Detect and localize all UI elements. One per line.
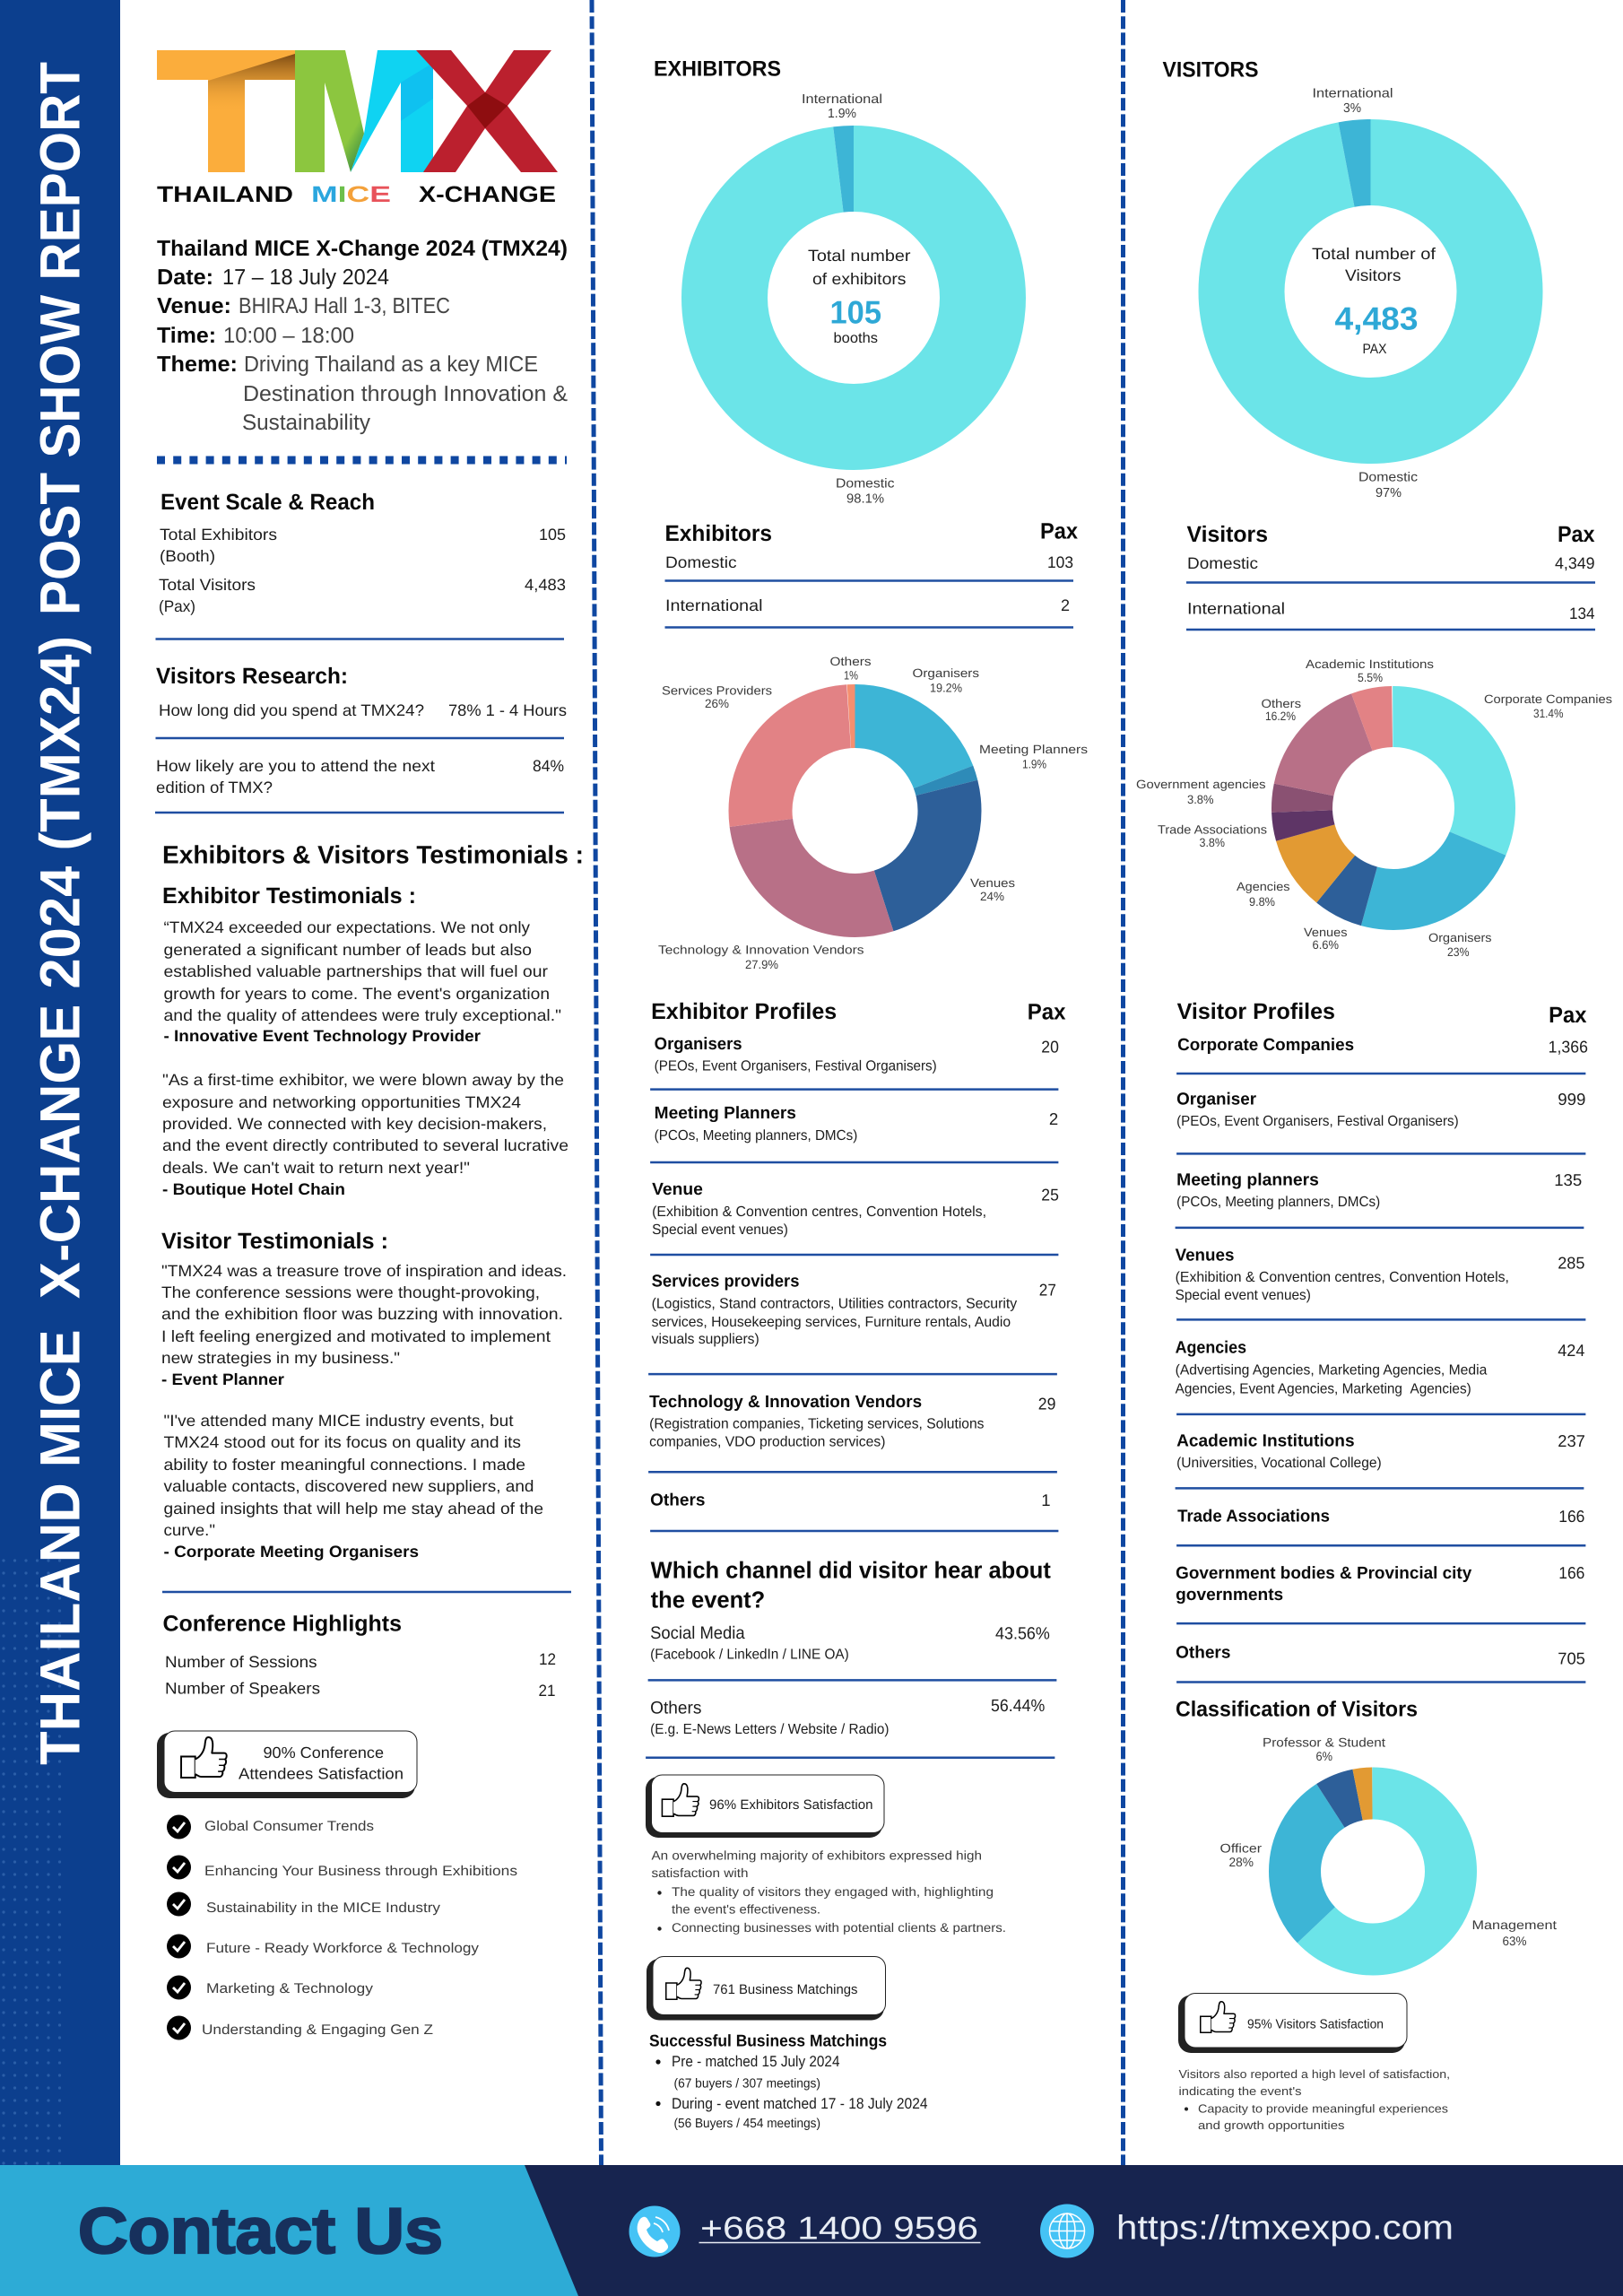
event details: Destination through Innovation & (243, 382, 568, 406)
badge: 761 business matchings: 761 Business Matchings (713, 1982, 857, 1997)
text: exhibitor satisfaction notes: An overwhelming majority of exhibitors expressed high (651, 1848, 982, 1862)
section: visitors research: How likely are you to attend the next (156, 757, 435, 775)
table: visitors domestic / international: Pax (1558, 522, 1595, 547)
donut chart: exhibitors origin: Domestic (836, 477, 895, 491)
donut chart: classification of visitors (1219, 1735, 1557, 1950)
section: conference highlights: 21 (538, 1682, 556, 1700)
donut chart: visitors origin: 3% (1343, 101, 1361, 116)
table: exhibitor profiles (648, 999, 1066, 1374)
table: exhibitor profiles continued: companies, VDO production services) (649, 1434, 885, 1450)
heading: visitors: VISITORS (1162, 57, 1259, 83)
table: exhibitor profiles continued: Technology & Innovation Vendors (649, 1393, 922, 1412)
visitor testimonial 2: gained insights that will help me stay ahead of the (163, 1500, 543, 1518)
badge: 90% conference attendees satisfaction: Attendees Satisfaction (239, 1765, 404, 1783)
donut chart: exhibitors origin: International (802, 92, 882, 107)
section: conference highlights (163, 1611, 556, 1700)
text: exhibitor satisfaction notes: Connecting businesses with potential clients & partners. (672, 1920, 1006, 1935)
column dividers (592, 0, 1123, 2165)
table: visitor profiles continued: Trade Associations (1177, 1507, 1330, 1526)
section: visitors research (156, 664, 567, 796)
text: visitor satisfaction notes: Capacity to provide meaningful experiences (1198, 2102, 1449, 2115)
donut chart: visitor profiles: 31.4% (1533, 707, 1564, 720)
section: visitor channel: Which channel did visitor hear about (651, 1556, 1051, 1583)
donut chart: exhibitor profiles: 1% (844, 669, 858, 682)
table: exhibitor profiles continued: Others (650, 1491, 705, 1509)
section: event scale and reach: 105 (539, 526, 566, 544)
section: event scale and reach (159, 490, 566, 615)
conference topics checklist: Global Consumer Trends (204, 1819, 374, 1834)
exhibitor testimonial 2: and the event directly contributed to several lucrative (162, 1136, 568, 1154)
exhibitor testimonial 2: - Boutique Hotel Chain (162, 1180, 345, 1198)
event details: 10:00 – 18:00 (223, 324, 354, 348)
donut chart: visitor profiles: Venues (1304, 926, 1348, 939)
section: visitor channel: (E.g. E-News Letters / Website / Radio) (650, 1722, 889, 1737)
exhibitor testimonial 1: “TMX24 exceeded our expectations. We not only (163, 918, 530, 936)
icon: thumbs up (1201, 2002, 1236, 2032)
event details: Venue: (157, 294, 231, 318)
table: visitor profiles: (PEOs, Event Organisers, Festival Organisers) (1176, 1114, 1459, 1129)
event details: Thailand MICE X-Change 2024 (TMX24) (157, 237, 568, 261)
donut chart: visitors origin: Domestic (1358, 470, 1418, 484)
table: visitors domestic / international: International (1187, 599, 1285, 617)
event details: Sustainability (242, 411, 371, 435)
logo: TMX: X-CHANGE (419, 182, 556, 207)
table: exhibitor profiles continued: 29 (1038, 1394, 1055, 1413)
exhibitor testimonial 2: "As a first-time exhibitor, we were blown away by the (162, 1071, 564, 1089)
table: visitor profiles continued: 237 (1558, 1431, 1585, 1450)
conference topics checklist: Understanding & Engaging Gen Z (202, 2022, 433, 2038)
table: visitor profiles: Special event venues) (1176, 1288, 1311, 1303)
donut chart: visitor profiles: 9.8% (1249, 895, 1275, 909)
table: visitor profiles: 999 (1558, 1090, 1585, 1109)
visitor testimonial 2: "I've attended many MICE industry events, but (163, 1412, 513, 1430)
donut chart: visitor profiles: 23% (1447, 945, 1469, 959)
donut chart: exhibitor profiles: Services Providers (662, 683, 772, 698)
section: event scale and reach: 4,483 (525, 576, 566, 594)
table: visitor profiles: Agencies (1176, 1338, 1246, 1358)
section: visitors research: How long did you spend at TMX24? (159, 701, 424, 719)
section: conference highlights: 12 (539, 1650, 556, 1668)
badge: 95% visitors satisfaction (1178, 1993, 1407, 2053)
exhibitor testimonial 1: - Innovative Event Technology Provider (163, 1027, 481, 1045)
table: visitor profiles: Pax (1549, 1003, 1586, 1028)
phone number: +668 1400 9596 (700, 2210, 978, 2246)
donut chart: visitors origin: PAX (1363, 342, 1387, 357)
donut chart: exhibitor profiles: Others (830, 655, 872, 668)
section: conference highlights: Number of Sessions (165, 1653, 317, 1671)
contact us heading: Contact Us (78, 2196, 443, 2267)
text: successful business matchings (649, 2031, 927, 2131)
table: visitor profiles: 135 (1554, 1170, 1582, 1189)
donut chart: exhibitors origin: of exhibitors (812, 270, 906, 288)
table: visitor profiles continued: Academic Institutions (1176, 1432, 1355, 1451)
icon: thumbs up (181, 1737, 227, 1778)
testimonials heading: Exhibitors & Visitors Testimonials : (162, 841, 584, 868)
table: exhibitors domestic / international: Pax (1040, 518, 1078, 544)
donut chart: classification of visitors: 28% (1228, 1855, 1254, 1869)
visitor testimonial 2: ability to foster meaningful connections. I made (163, 1456, 525, 1474)
table: visitors domestic / international: Visitors (1187, 522, 1268, 547)
table: visitors domestic / international: 134 (1569, 604, 1594, 622)
table: visitor profiles: Venues (1176, 1246, 1234, 1265)
conference topics checklist (167, 1815, 517, 2039)
table: exhibitor profiles: services, Housekeeping services, Furniture rentals, Audio (652, 1315, 1011, 1330)
donut chart: visitor profiles: 3.8% (1187, 793, 1214, 806)
visitor testimonials heading: Visitor Testimonials : (161, 1229, 388, 1254)
exhibitor testimonial 1: generated a significant number of leads but also (163, 941, 532, 959)
visitor testimonial 1: and the exhibition floor was buzzing with innovation. (161, 1305, 563, 1323)
badge: 90% conference attendees satisfaction (157, 1731, 417, 1798)
donut chart: visitor profiles: Others (1261, 697, 1301, 710)
table: exhibitors domestic / international (665, 518, 1078, 628)
icon: thumbs up (662, 1784, 699, 1816)
donut chart: visitor profiles: Organisers (1428, 931, 1492, 944)
visitor testimonial 1: new strategies in my business." (161, 1349, 400, 1367)
text: successful business matchings: (67 buyers / 307 meetings) (674, 2077, 820, 2092)
section: visitor channel: Others (650, 1698, 702, 1718)
section: event scale and reach: (Booth) (160, 547, 215, 565)
donut chart: exhibitor profiles: 24% (980, 890, 1004, 903)
donut chart: exhibitor profiles: Venues (970, 876, 1015, 890)
donut chart: visitors origin: Total number of (1312, 245, 1436, 263)
table: visitor profiles: 285 (1558, 1253, 1584, 1273)
panel: left column (155, 50, 584, 2039)
donut chart: visitor profiles: 5.5% (1358, 671, 1383, 684)
conference topics checklist: Future - Ready Workforce & Technology (206, 1941, 479, 1956)
donut chart: exhibitor profiles: 26% (705, 697, 729, 710)
table: visitor profiles continued: 166 (1558, 1563, 1584, 1582)
vertical report title (29, 62, 91, 1765)
icon: thumbs up (666, 1968, 701, 1999)
table: visitor profiles: Agencies, Event Agencies, Marketing Agencies) (1176, 1381, 1471, 1396)
table: exhibitors domestic / international: International (665, 596, 762, 614)
section: visitors research: 78% 1 - 4 Hours (448, 701, 567, 719)
event details: Theme: (157, 352, 238, 377)
donut chart: classification of visitors: Management (1472, 1918, 1557, 1932)
logo: TMX (157, 50, 558, 207)
table: visitor profiles: Visitor Profiles (1177, 999, 1335, 1024)
exhibitor testimonial 2: provided. We connected with key decision-makers, (162, 1115, 547, 1133)
event details: Time: (157, 324, 216, 348)
text: exhibitor satisfaction notes: satisfaction with (651, 1866, 748, 1880)
table: visitor profiles continued: 166 (1558, 1507, 1584, 1526)
table: exhibitor profiles: Special event venues) (652, 1222, 788, 1238)
text: visitor satisfaction notes (1178, 2067, 1450, 2132)
donut chart: classification of visitors: Officer (1219, 1840, 1262, 1855)
text: exhibitor satisfaction notes: the event's effectiveness. (672, 1901, 820, 1916)
donut chart: exhibitor profiles: Technology & Innovation Vendors (658, 944, 864, 956)
donut chart: visitors origin: International (1313, 86, 1393, 100)
table: visitor profiles (1176, 999, 1588, 1414)
section: visitors research: Visitors Research: (156, 664, 348, 689)
section: conference highlights: Number of Speakers (165, 1679, 320, 1697)
visitor testimonial 1: - Event Planner (161, 1370, 284, 1388)
visitor testimonial 2 (163, 1412, 543, 1561)
vertical report title: POST SHOW REPORT (29, 62, 91, 615)
donut chart: classification of visitors: 63% (1503, 1934, 1526, 1948)
panel: right column (1136, 57, 1612, 2132)
table: exhibitor profiles: visuals suppliers) (652, 1332, 759, 1347)
exhibitor testimonial 2 (162, 1071, 568, 1198)
donut chart: visitor profiles (1136, 657, 1612, 959)
event details (157, 237, 568, 435)
text: successful business matchings: (56 Buyers / 454 meetings) (674, 2117, 820, 2131)
text: visitor satisfaction notes: indicating the event's (1178, 2084, 1302, 2098)
table: exhibitor profiles: Meeting Planners (655, 1104, 796, 1123)
table: exhibitor profiles: 20 (1041, 1037, 1059, 1056)
exhibitor testimonial 1: established valuable partnerships that will fuel our (163, 962, 548, 980)
donut chart: visitor profiles: Government agencies (1136, 778, 1266, 791)
icon: phone (629, 2206, 680, 2257)
table: exhibitor profiles: 27 (1039, 1281, 1056, 1300)
visitor testimonial 2: valuable contacts, discovered new suppliers, and (163, 1477, 534, 1495)
exhibitor testimonial 1 (163, 918, 561, 1045)
table: exhibitors domestic / international: 103 (1047, 553, 1073, 571)
donut chart: visitor profiles: Academic Institutions (1306, 657, 1434, 671)
donut chart: visitor profiles: Corporate Companies (1484, 692, 1612, 706)
footer: contact bar (0, 2165, 1623, 2296)
conference topics checklist: Marketing & Technology (206, 1981, 373, 1996)
table: exhibitor profiles: Exhibitor Profiles (651, 999, 837, 1024)
table: exhibitor profiles: Organisers (655, 1035, 742, 1054)
section: visitor channel: Social Media (650, 1623, 745, 1643)
table: exhibitors domestic / international: Exhibitors (665, 521, 772, 546)
table: visitor profiles: Organiser (1176, 1091, 1257, 1109)
table: visitor profiles: (PCOs, Meeting planners, DMCs) (1176, 1195, 1380, 1210)
table: visitor profiles continued: governments (1176, 1586, 1283, 1605)
table: visitors domestic / international: Domestic (1187, 554, 1258, 572)
event details: BHIRAJ Hall 1-3, BITEC (239, 294, 450, 318)
section: visitors research: 84% (533, 757, 564, 775)
section: event scale and reach: Total Visitors (159, 576, 256, 594)
table: visitor profiles: (Exhibition & Convention centres, Convention Hotels, (1176, 1270, 1509, 1285)
table: exhibitor profiles: 2 (1049, 1109, 1058, 1128)
section: visitor channel: 56.44% (991, 1697, 1045, 1716)
left sidebar band (0, 0, 120, 2165)
section: visitor channel (646, 1556, 1056, 1758)
badge: 96% exhibitors satisfaction: 96% Exhibitors Satisfaction (709, 1797, 873, 1813)
table: exhibitor profiles: (Logistics, Stand contractors, Utilities contractors, Security (652, 1296, 1017, 1311)
event details: Date: (157, 265, 213, 290)
badge: 96% exhibitors satisfaction (646, 1775, 884, 1838)
donut chart: exhibitors origin (725, 92, 983, 506)
text: successful business matchings: Pre - matched 15 July 2024 (672, 2053, 839, 2070)
exhibitor testimonial 1: growth for years to come. The event's organization (163, 985, 550, 1003)
donut chart: exhibitors origin: Total number (808, 247, 911, 265)
donut chart: exhibitor profiles: Organisers (913, 666, 979, 680)
section: event scale and reach: (Pax) (159, 597, 195, 615)
badge: 761 business matchings (647, 1957, 886, 2020)
heading: exhibitors: EXHIBITORS (654, 57, 781, 81)
table: exhibitor profiles: Pax (1028, 1000, 1066, 1025)
text: exhibitor satisfaction notes (651, 1848, 1006, 1935)
donut chart: visitor profiles: 16.2% (1265, 709, 1296, 723)
visitor testimonial 2: TMX24 stood out for its focus on quality and its (163, 1433, 521, 1451)
badge: 95% visitors satisfaction: 95% Visitors Satisfaction (1247, 2018, 1384, 2032)
donut chart: classification of visitors: 6% (1316, 1749, 1332, 1763)
section: event scale and reach: Event Scale & Reach (161, 490, 375, 515)
visitor testimonial 1: I left feeling energized and motivated to implement (161, 1327, 551, 1345)
donut chart: visitors origin: Visitors (1345, 266, 1401, 284)
donut chart: exhibitor profiles: 1.9% (1022, 757, 1046, 771)
donut chart: exhibitor profiles: 27.9% (745, 958, 778, 971)
logo: TMX: THAILAND (157, 182, 293, 207)
section: conference highlights: Conference Highlights (163, 1611, 402, 1636)
panel: middle column (646, 57, 1088, 2131)
table: exhibitor profiles: (PEOs, Event Organisers, Festival Organisers) (655, 1058, 937, 1074)
visitor testimonial 2: - Corporate Meeting Organisers (163, 1543, 419, 1561)
visitor testimonial 1: The conference sessions were thought-provoking, (161, 1283, 540, 1301)
section: visitor channel: the event? (651, 1586, 765, 1613)
table: visitor profiles continued: 705 (1558, 1648, 1585, 1667)
table: exhibitor profiles continued (648, 1393, 1058, 1531)
visitor testimonial 1: "TMX24 was a treasure trove of inspiration and ideas. (161, 1262, 567, 1280)
table: visitor profiles: (Advertising Agencies, Marketing Agencies, Media (1176, 1363, 1487, 1378)
exhibitor testimonials heading: Exhibitor Testimonials : (162, 883, 416, 909)
exhibitor testimonial 2: exposure and networking opportunities TMX24 (162, 1093, 521, 1111)
donut chart: visitors origin (1241, 86, 1499, 500)
table: visitors domestic / international: 4,349 (1555, 554, 1594, 572)
table: exhibitor profiles: (Exhibition & Convention centres, Convention Hotels, (652, 1205, 986, 1220)
table: exhibitor profiles: 25 (1041, 1186, 1059, 1205)
vertical report title: THAILAND MICE X-CHANGE 2024 (TMX24) (29, 636, 91, 1765)
donut chart: visitor profiles: Trade Associations (1158, 823, 1267, 836)
heading: classification of visitors: Classification of Visitors (1176, 1697, 1418, 1722)
text: exhibitor satisfaction notes: The quality of visitors they engaged with, highlighting (672, 1884, 994, 1899)
table: visitors domestic / international (1186, 522, 1595, 630)
table: visitor profiles: Meeting planners (1176, 1171, 1319, 1190)
donut chart: visitors origin: 4,483 (1334, 300, 1419, 337)
section: visitor channel: (Facebook / LinkedIn / LINE OA) (650, 1648, 849, 1663)
table: exhibitor profiles continued: 1 (1041, 1491, 1051, 1509)
section: visitor channel: 43.56% (995, 1625, 1050, 1644)
table: visitor profiles continued: Government bodies & Provincial city (1176, 1564, 1472, 1583)
section: testimonials (161, 841, 584, 1561)
visitor testimonial 2: curve." (163, 1521, 215, 1539)
donut chart: exhibitor profiles: 19.2% (930, 682, 962, 694)
donut chart: exhibitors origin: booths (834, 331, 878, 346)
table: visitor profiles continued: Others (1176, 1643, 1230, 1662)
donut chart: exhibitors origin: 98.1% (846, 491, 884, 506)
badge: 90% conference attendees satisfaction: 90% Conference (264, 1744, 384, 1761)
table: visitor profiles: Corporate Companies (1177, 1036, 1354, 1055)
section: visitors research: edition of TMX? (156, 778, 273, 796)
donut chart: classification of visitors: Professor & Student (1263, 1735, 1385, 1749)
text: visitor satisfaction notes: and growth opportunities (1198, 2118, 1345, 2132)
table: exhibitor profiles: Services providers (652, 1273, 799, 1292)
section: event scale and reach: Total Exhibitors (160, 526, 277, 544)
logo: TMX: M IC E (311, 182, 391, 207)
table: visitor profiles: 1,366 (1549, 1037, 1588, 1056)
donut chart: exhibitors origin: 105 (830, 294, 881, 330)
table: visitor profiles continued: (Universities, Vocational College) (1176, 1456, 1382, 1471)
event details: 17 – 18 July 2024 (222, 265, 389, 290)
donut chart: visitor profiles: Agencies (1237, 880, 1290, 893)
conference topics checklist: Enhancing Your Business through Exhibitions (204, 1864, 517, 1879)
table: exhibitors domestic / international: 2 (1061, 596, 1070, 614)
table: exhibitor profiles: (PCOs, Meeting planners, DMCs) (655, 1128, 857, 1144)
text: visitor satisfaction notes: Visitors also reported a high level of satisfaction, (1178, 2067, 1450, 2081)
donut chart: visitor profiles: 6.6% (1313, 938, 1339, 952)
table: exhibitor profiles: Venue (652, 1180, 703, 1199)
donut chart: exhibitors origin: 1.9% (828, 107, 856, 121)
exhibitor testimonial 1: and the quality of attendees were truly exceptional." (163, 1006, 561, 1024)
table: exhibitors domestic / international: Domestic (665, 553, 737, 571)
donut chart: visitor profiles: 3.8% (1200, 836, 1225, 849)
conference topics checklist: Sustainability in the MICE Industry (206, 1900, 440, 1916)
exhibitor testimonial 2: deals. We can't wait to return next year!" (162, 1159, 470, 1177)
table: visitor profiles continued (1176, 1431, 1585, 1682)
donut chart: exhibitor profiles (658, 655, 1088, 971)
text: successful business matchings: During - event matched 17 - 18 July 2024 (672, 2095, 927, 2112)
visitor testimonial 1 (161, 1262, 567, 1388)
text: successful business matchings: Successful Business Matchings (649, 2031, 887, 2050)
website: https://tmxexpo.com (1116, 2210, 1454, 2248)
table: visitor profiles: 424 (1558, 1341, 1584, 1360)
donut chart: visitors origin: 97% (1376, 486, 1402, 500)
event details: Driving Thailand as a key MICE (244, 352, 538, 377)
donut chart: exhibitor profiles: Meeting Planners (979, 743, 1088, 756)
icon: globe (1040, 2205, 1094, 2258)
table: exhibitor profiles continued: (Registration companies, Ticketing services, Solutions (649, 1416, 984, 1431)
